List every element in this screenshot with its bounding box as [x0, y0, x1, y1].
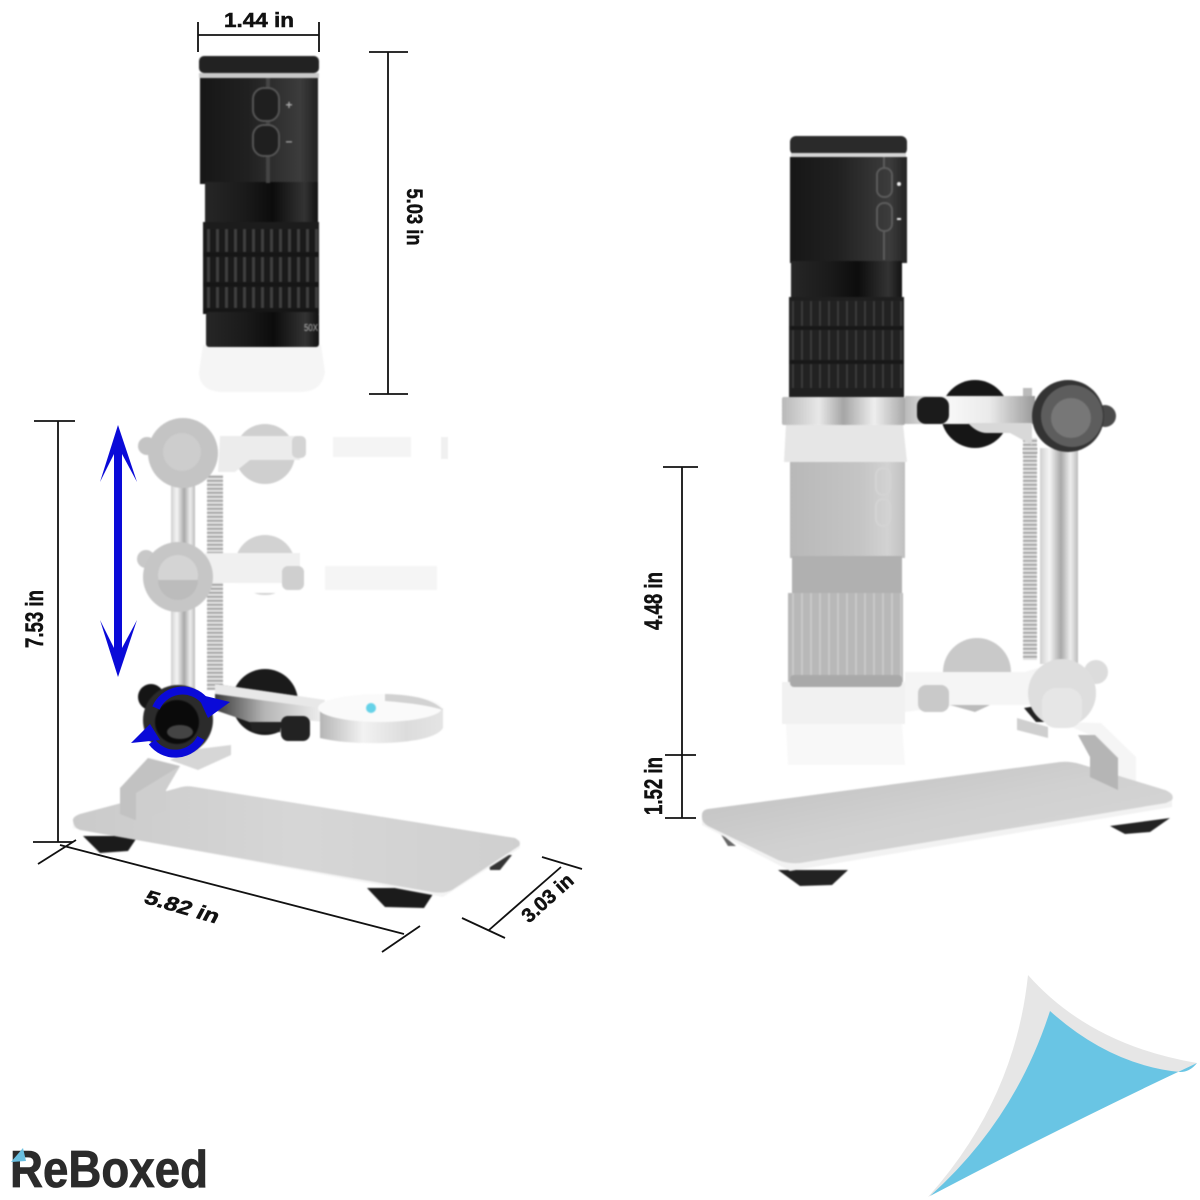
- dimension: 5.03 in: [369, 52, 427, 394]
- clamp arm: [905, 396, 1035, 424]
- logo accent: [11, 1148, 26, 1162]
- label: 4.48 in: 4.48 in: [640, 572, 668, 630]
- collar: [791, 261, 902, 298]
- dimension: 3.03 in: 3.03 in: [518, 870, 578, 927]
- magnification mark: 50X: [304, 323, 318, 334]
- plus and minus marks: –: [286, 134, 293, 148]
- button outlines: [877, 157, 892, 260]
- right stand: base plate: [702, 735, 1173, 886]
- ghost lens top: [784, 424, 907, 462]
- ring holder: [320, 708, 443, 743]
- label: 1.52 in: 1.52 in: [640, 757, 668, 815]
- left stand: base and arm: [73, 745, 520, 908]
- dimension: 1.44 in: [198, 10, 319, 52]
- ghost collar: [792, 556, 902, 594]
- silver ring: [791, 153, 906, 157]
- lower support arm: [1078, 735, 1118, 790]
- ghost bent support: [1060, 722, 1136, 790]
- dimension: 3.03 in: [462, 857, 582, 938]
- body: [790, 157, 907, 263]
- right foot: [1110, 818, 1170, 834]
- support arm front face: [136, 766, 180, 820]
- threaded rod top: [1023, 438, 1037, 454]
- dimension: 5.82 in: 5.82 in: [140, 887, 224, 928]
- pillar: [1040, 448, 1078, 664]
- nub: [138, 684, 164, 710]
- plus and minus marks: [285, 98, 293, 148]
- logo: ReBoxed: ReBoxed: [10, 1141, 208, 1199]
- decoration: page corner: [928, 975, 1197, 1197]
- body: [200, 76, 318, 184]
- clamp arm: [215, 684, 325, 738]
- dimension: 5.82 in: [38, 840, 420, 952]
- ghost screw: [918, 685, 949, 712]
- left stand: lowest clamp: [138, 669, 443, 755]
- black disc: [941, 380, 1009, 448]
- dimension: 7.53 in: [21, 421, 75, 842]
- buttons: [253, 78, 279, 183]
- ghost disc: [943, 638, 1011, 672]
- plate side: [702, 798, 1172, 871]
- top position ghost: [138, 418, 448, 488]
- side nub: [1094, 405, 1116, 427]
- stem below arm: [250, 722, 282, 732]
- indicator marks: [897, 182, 901, 220]
- dimension: 4.48 in and 1.52 in: [640, 467, 698, 818]
- clamp block: [170, 745, 231, 770]
- base plate side: [73, 820, 520, 897]
- rear-left foot: [720, 833, 736, 846]
- dimension: 7.53 in: 7.53 in: [21, 590, 49, 648]
- pillar: [171, 480, 195, 695]
- small top pin: [1023, 388, 1032, 398]
- cap: [790, 136, 907, 155]
- ghost knob: [1028, 659, 1096, 727]
- big knob: [143, 685, 213, 755]
- clamp block: [1017, 718, 1048, 738]
- ghost ring holder: [782, 682, 905, 724]
- middle position ghost: [137, 535, 437, 612]
- threaded rod: [1023, 448, 1037, 660]
- dimension: 5.03 in: 5.03 in: [402, 188, 427, 246]
- ghost button outlines: [876, 468, 890, 526]
- front-right foot: [367, 888, 437, 908]
- base plate: [73, 786, 520, 893]
- right stand: faded lower microscope and clamp: [782, 424, 1136, 790]
- silver ring: [199, 73, 319, 78]
- big knob: [1032, 380, 1104, 452]
- ghost nub: [1084, 660, 1108, 684]
- dimension: 1.44 in: 1.44 in: [224, 10, 294, 32]
- focus ring: [789, 297, 904, 397]
- black disc: [232, 669, 298, 735]
- ghost body: [790, 462, 905, 558]
- small screw: [281, 716, 310, 741]
- clear lens cap: [199, 345, 325, 392]
- support arm: [120, 758, 180, 820]
- microscope: right assembled view: [782, 136, 1116, 454]
- focus ring: [203, 222, 319, 314]
- silver ring holder: [782, 397, 905, 425]
- clamp screw: [917, 397, 949, 424]
- ghost focus ring: [788, 593, 903, 685]
- rear foot: [488, 855, 512, 870]
- plate: [702, 762, 1173, 863]
- front-left foot: [83, 836, 138, 853]
- arrow: rotating knob: [131, 691, 230, 754]
- clamp block dark: [1024, 706, 1048, 722]
- arrow: vertical travel: [100, 425, 137, 677]
- threaded rod: [207, 475, 223, 690]
- collar: [205, 182, 318, 224]
- lower band: [206, 312, 319, 347]
- front foot: [778, 870, 848, 886]
- plus and minus marks: +: [285, 98, 293, 112]
- clamp bracket: [968, 423, 1032, 445]
- cap: [199, 56, 319, 73]
- ghost lens bottom: [786, 724, 905, 765]
- ghost clamp arm: [905, 668, 1038, 712]
- blue indicator: [366, 703, 376, 713]
- left stand: faded upper positions: [137, 418, 448, 695]
- microscope: top product view: [199, 56, 325, 392]
